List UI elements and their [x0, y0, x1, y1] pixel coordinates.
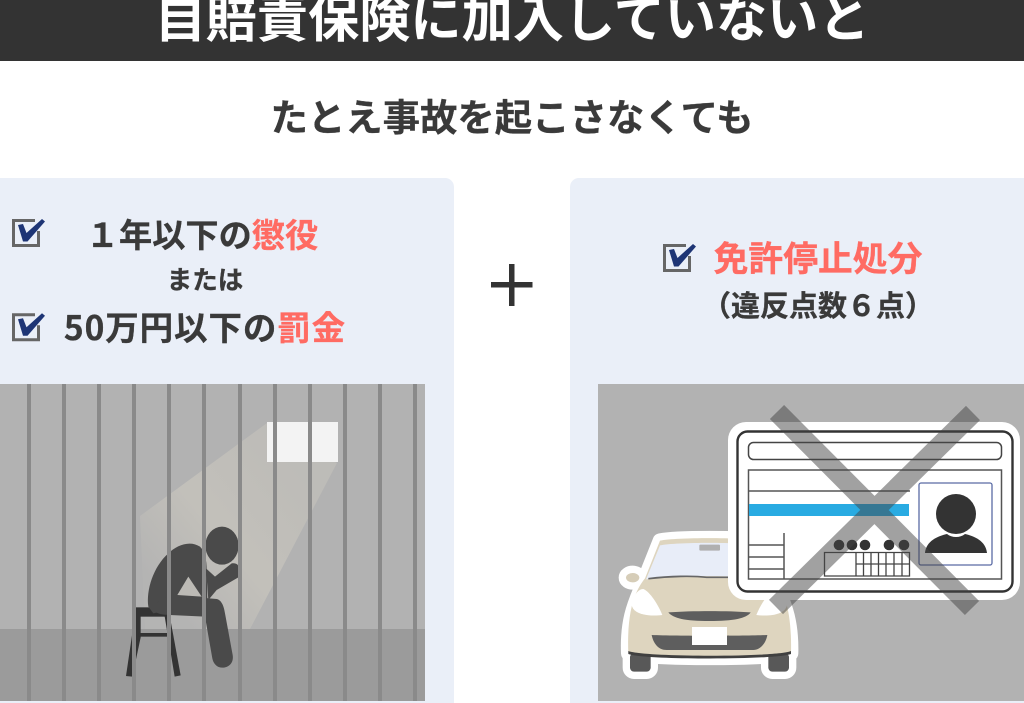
grille — [668, 611, 751, 621]
icon: checkbox 1 — [14, 219, 45, 246]
or label: または — [167, 260, 243, 297]
icon: checkbox 2 — [14, 313, 45, 340]
cell floor — [0, 629, 425, 701]
title banner — [0, 0, 1024, 61]
stool — [126, 607, 181, 677]
penalty line 1: １年以下の懲役 — [86, 208, 318, 257]
icon: plus sign — [491, 264, 532, 306]
cell bars — [27, 384, 417, 701]
windshield — [646, 542, 728, 580]
penalty line 2: 50万円以下の罰金 — [64, 301, 346, 350]
subheading: たとえ事故を起こさなくても — [270, 88, 754, 142]
number grid — [824, 552, 910, 576]
wiper — [648, 576, 737, 579]
gap between arm and body — [177, 577, 202, 597]
tires — [630, 653, 651, 672]
headlight left — [632, 589, 662, 616]
driver license card — [728, 422, 1020, 600]
car white outline — [626, 538, 791, 672]
illustration: license and car — [598, 384, 1024, 701]
light beam — [140, 423, 337, 629]
stamp table — [748, 533, 784, 579]
headlight right — [756, 600, 787, 616]
mirror — [626, 573, 639, 582]
seated person — [148, 527, 239, 668]
cross mark — [776, 412, 973, 608]
rearview mirror — [699, 545, 720, 551]
blue stripe — [749, 504, 909, 516]
window — [267, 422, 338, 462]
license plate — [692, 627, 727, 645]
panel: penalty — [0, 178, 454, 703]
car body — [628, 538, 791, 658]
illustration: prison cell — [0, 384, 425, 701]
panel: license suspension — [570, 178, 1024, 703]
icon: checkbox 3 — [664, 244, 696, 270]
license subheading: （違反点数６点） — [702, 283, 934, 325]
car — [626, 538, 791, 672]
lower intake — [652, 635, 767, 650]
id photo — [919, 483, 992, 565]
dots — [834, 540, 909, 550]
bumper band — [628, 651, 791, 658]
license heading: 免許停止処分 — [714, 232, 922, 282]
